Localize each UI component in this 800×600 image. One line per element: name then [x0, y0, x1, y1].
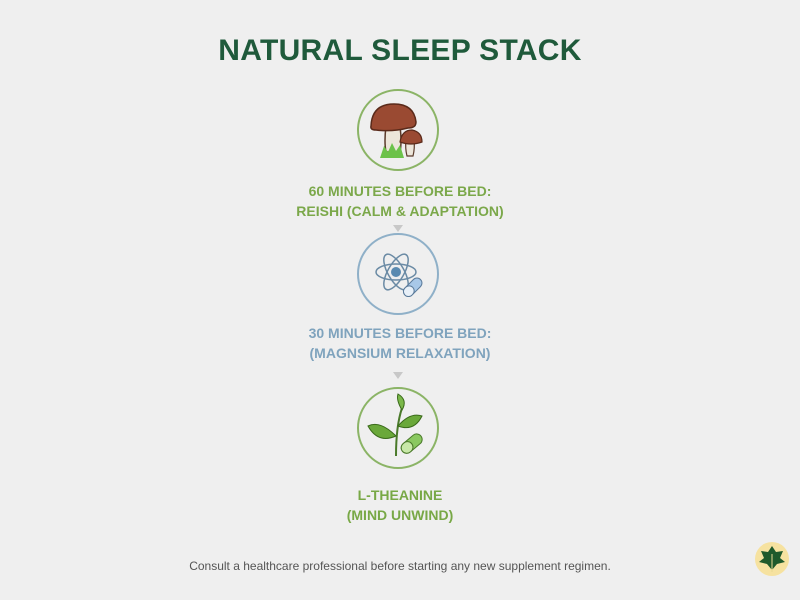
icon: atom and capsule [357, 233, 439, 315]
title: NATURAL SLEEP STACK [218, 34, 582, 67]
text: step 3: L-THEANINE [358, 487, 442, 503]
text: step 1: 60 MINUTES BEFORE BED: [309, 183, 491, 199]
text: step 2: (MAGNSIUM RELAXATION) [310, 345, 490, 361]
arrow 2 [393, 372, 403, 379]
text: step 3 [347, 487, 453, 523]
text: step 2: 30 MINUTES BEFORE BED: [309, 325, 491, 341]
icon: leaf badge [755, 542, 789, 576]
icon: mushroom [357, 89, 439, 171]
arrow 1 [393, 225, 403, 232]
text: step 2 [309, 325, 491, 361]
text: step 3: (MIND UNWIND) [347, 507, 453, 523]
icon: tea leaves and capsule [357, 387, 439, 469]
text: step 1 [296, 183, 504, 219]
footer disclaimer: Consult a healthcare professional before starting any new supplement regimen. [189, 559, 611, 573]
text: step 1: REISHI (CALM & ADAPTATION) [296, 203, 504, 219]
